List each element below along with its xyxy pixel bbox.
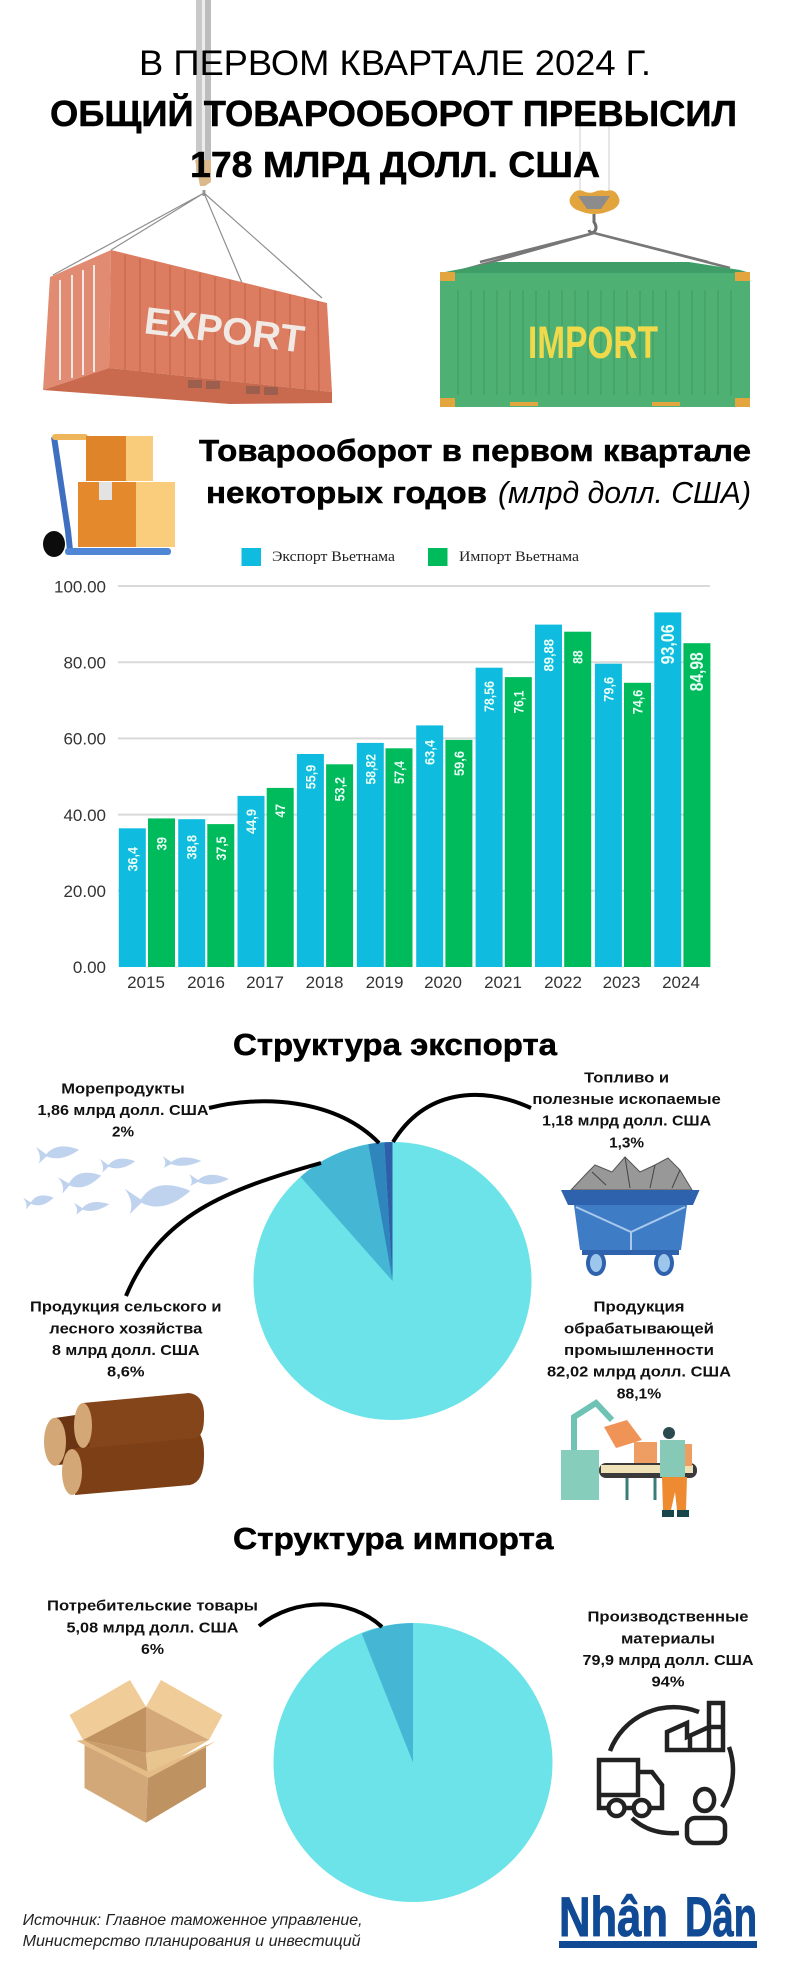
bars and values: 2020: 59,6 <box>451 751 467 776</box>
label: consumer goods: 6% <box>141 1641 164 1658</box>
logo: Nhan Dan: Dân <box>685 1885 757 1948</box>
legend: Импорт Вьетнама <box>459 549 579 565</box>
label: production materials: Производственные <box>588 1609 748 1626</box>
bar chart: 80.00 <box>63 654 106 672</box>
bar chart: 2015 <box>127 973 165 992</box>
label: manufacturing: Продукция <box>594 1299 684 1316</box>
label: fuel and minerals <box>532 1069 721 1151</box>
source note <box>23 1912 363 1950</box>
bars and values: 2022: 88 <box>570 650 586 664</box>
export container with crane cable <box>43 0 332 404</box>
label: manufacturing: промышленности <box>564 1342 714 1359</box>
label: agriculture and forestry <box>30 1299 222 1381</box>
title: В ПЕРВОМ КВАРТАЛЕ 2024 Г. <box>139 43 651 83</box>
label: consumer goods: 5,08 млрд долл. США <box>66 1619 239 1636</box>
pie chart: export structure <box>254 1142 532 1420</box>
title: 178 МЛРД ДОЛЛ. США <box>190 144 600 185</box>
title: ОБЩИЙ ТОВАРООБОРОТ ПРЕВЫСИЛ <box>50 92 737 134</box>
heading: export structure: Структура экспорта <box>233 1027 558 1062</box>
bars and values: 2019: 58,82 <box>362 754 378 784</box>
chart heading: некоторых годов <box>206 475 487 510</box>
label: consumer goods <box>47 1598 258 1658</box>
bars and values: 2024: 84,98 <box>687 652 707 691</box>
bars and values: 2016 <box>178 819 234 967</box>
bar chart: 0.00 <box>73 958 106 977</box>
pie chart: import structure <box>274 1623 552 1902</box>
label: seafood <box>38 1080 209 1141</box>
bars and values: 2018: 53,2 <box>332 777 348 802</box>
label: fuel and minerals: 1,18 млрд долл. США <box>542 1113 711 1130</box>
bars and values: 2016: 37,5 <box>213 836 229 860</box>
bars and values: 2018 <box>297 754 353 967</box>
bars and values: 2020 <box>416 725 472 967</box>
bars and values: 2015: 39 <box>154 837 170 850</box>
label: seafood: 2% <box>112 1124 134 1141</box>
bar chart: 2024 <box>662 973 700 992</box>
legend: Экспорт Вьетнама <box>272 549 395 565</box>
label: EXPORT: EXPORT <box>142 300 307 362</box>
bars and values: 2021: 78,56 <box>481 681 497 712</box>
leader lines: export <box>126 1095 531 1296</box>
heading: import structure: Структура импорта <box>233 1521 554 1556</box>
bars and values: 2023 <box>595 664 651 967</box>
label: agriculture and forestry: лесного хозяйства <box>49 1320 203 1337</box>
label: consumer goods: Потребительские товары <box>47 1598 258 1615</box>
logo: Nhan Dan: Nhân <box>559 1885 668 1948</box>
chart heading: Товарооборот в первом квартале <box>199 433 751 468</box>
icon: hand truck with boxes <box>43 434 175 557</box>
bars and values: 2019: 57,4 <box>391 761 407 784</box>
label: fuel and minerals: полезные ископаемые <box>532 1091 721 1108</box>
bars and values: 2022: 89,88 <box>540 639 556 672</box>
label: agriculture and forestry: 8,6% <box>107 1364 145 1381</box>
label: manufacturing: 82,02 млрд долл. США <box>547 1364 731 1381</box>
label: manufacturing: 88,1% <box>617 1385 661 1402</box>
leader line: import <box>259 1604 382 1627</box>
bars and values: 2024: 93,06 <box>658 624 678 664</box>
bars and values: 2016: 38,8 <box>184 835 200 860</box>
label: IMPORT: IMPORT <box>528 317 658 368</box>
source note: Министерство планирования и инвестиций <box>23 1933 361 1950</box>
label: manufacturing <box>547 1299 731 1402</box>
icon: open cardboard box <box>70 1680 222 1823</box>
bar chart: 2020 <box>424 973 462 992</box>
chart heading <box>199 433 751 510</box>
label: agriculture and forestry: Продукция сельского и <box>30 1299 222 1316</box>
bars and values: 2017: 44,9 <box>243 809 259 834</box>
label: agriculture and forestry: 8 млрд долл. США <box>52 1342 200 1359</box>
bars and values: 2017 <box>238 788 294 967</box>
icon: production cycle <box>599 1703 733 1843</box>
bar chart: 60.00 <box>63 730 106 748</box>
bars and values: 2019 <box>357 743 412 967</box>
bars and values: 2023: 79,6 <box>600 677 616 702</box>
bar chart: 2022 <box>544 973 582 992</box>
label: production materials: 79,9 млрд долл. США <box>582 1652 754 1669</box>
bars and values: 2021: 76,1 <box>510 690 526 714</box>
bar chart: 2016 <box>187 973 225 992</box>
icon: factory worker at conveyor <box>561 1403 697 1517</box>
bars and values: 2023: 74,6 <box>630 690 646 714</box>
bar chart: 2023 <box>603 973 640 992</box>
bar chart: 2021 <box>484 973 522 992</box>
bars and values: 2024 <box>654 612 710 967</box>
bars and values: 2015 <box>119 818 175 967</box>
bar chart: 20.00 <box>63 882 106 901</box>
label: fuel and minerals: Топливо и <box>584 1069 669 1086</box>
source note: Источник: Главное таможенное управление, <box>23 1912 363 1929</box>
bars and values: 2015: 36,4 <box>124 847 140 872</box>
bars and values: 2017: 47 <box>272 804 288 818</box>
bar chart: 2018 <box>306 973 344 992</box>
bar chart: 100.00 <box>54 578 106 596</box>
bar chart: 40.00 <box>63 806 106 825</box>
icon: wooden logs <box>44 1393 204 1495</box>
import container with crane hook <box>440 125 750 407</box>
chart heading: (млрд долл. США) <box>498 475 751 510</box>
icon: fish school <box>23 1142 229 1215</box>
label: production materials: материалы <box>621 1630 715 1647</box>
bars and values: 2018: 55,9 <box>302 765 318 789</box>
label: fuel and minerals: 1,3% <box>609 1134 644 1151</box>
bars and values: 2021 <box>476 668 532 967</box>
label: production materials: 94% <box>652 1674 684 1691</box>
bar chart: 2017 <box>246 973 284 992</box>
icon: mine cart with ore <box>561 1157 700 1276</box>
bar chart: 2019 <box>366 973 403 992</box>
label: seafood: Морепродукты <box>61 1080 185 1097</box>
title <box>50 43 737 185</box>
label: seafood: 1,86 млрд долл. США <box>38 1102 209 1119</box>
label: production materials <box>582 1609 754 1691</box>
bars and values: 2022 <box>535 625 591 967</box>
bar chart <box>54 578 710 992</box>
bars and values: 2020: 63,4 <box>422 740 438 765</box>
legend <box>242 548 579 566</box>
label: manufacturing: обрабатывающей <box>564 1320 714 1337</box>
